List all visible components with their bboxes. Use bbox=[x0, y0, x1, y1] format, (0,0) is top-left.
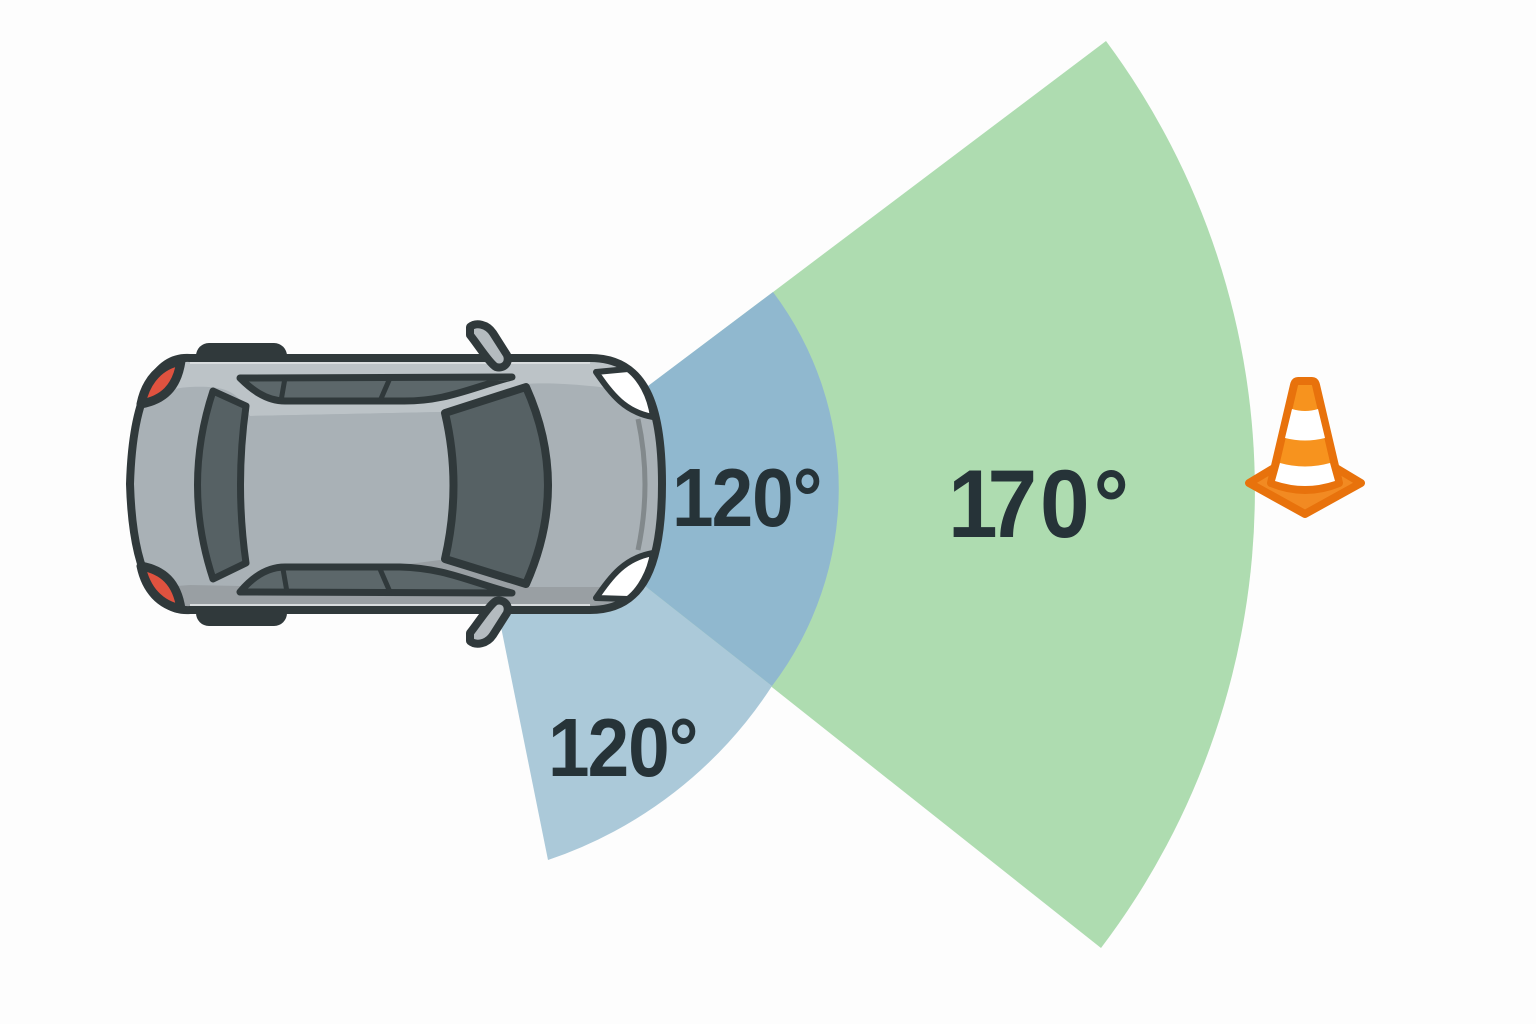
mirror top bbox=[470, 324, 508, 367]
sector: 120 degree lower light blue field of view bbox=[498, 582, 772, 860]
label: front 120 degrees: 120° bbox=[672, 451, 822, 544]
sector: 170 degree green field of view bbox=[517, 41, 1255, 948]
sector: 120 degree front dark blue field of view bbox=[640, 292, 839, 686]
grille line bbox=[638, 419, 645, 550]
tail light bottom bbox=[141, 566, 181, 609]
car, top view bbox=[120, 324, 680, 644]
mirror bottom bbox=[470, 601, 508, 644]
tail light top bbox=[141, 361, 181, 404]
car body bbox=[120, 350, 680, 620]
headlight top bbox=[596, 369, 653, 417]
side windows top bbox=[240, 377, 512, 401]
cone body bbox=[1271, 381, 1339, 490]
icon: traffic cone bbox=[1249, 381, 1361, 514]
white band upper bbox=[1285, 409, 1325, 440]
headlight bottom bbox=[596, 553, 653, 599]
label: 170 degrees: 170° bbox=[948, 450, 1129, 558]
windshield bbox=[445, 387, 548, 584]
white band lower bbox=[1275, 463, 1335, 486]
side windows bottom bbox=[240, 567, 512, 593]
rear window bbox=[198, 391, 246, 579]
label: lower 120 degrees: 120° bbox=[548, 701, 698, 794]
cone base bbox=[1249, 468, 1361, 514]
rear wheel arches bbox=[196, 343, 287, 626]
